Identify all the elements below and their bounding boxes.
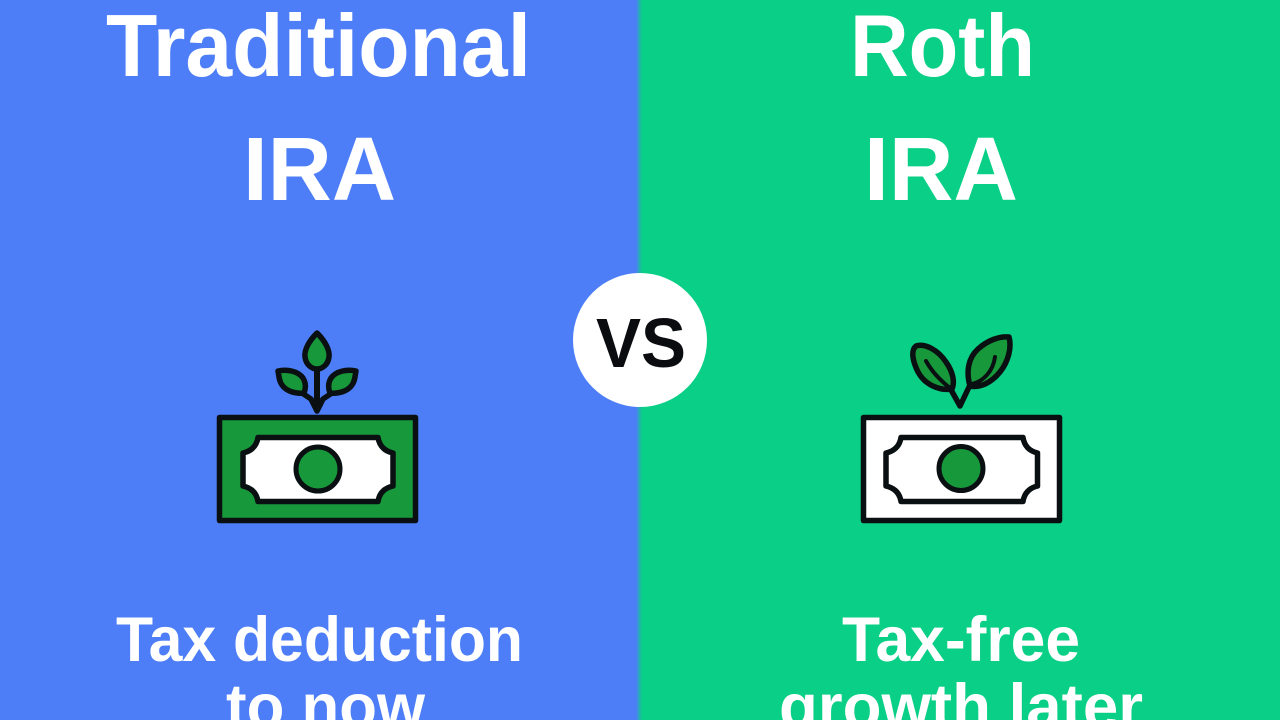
icon: banknote with sprout, white — [864, 337, 1060, 520]
heading: Traditional IRA — [106, 0, 531, 220]
heading: Traditional IRA: IRA — [243, 120, 396, 220]
heading: Roth IRA: IRA — [864, 120, 1018, 220]
panel: traditional IRA — [0, 0, 640, 720]
icon: two leaves — [913, 337, 1010, 406]
icon: green banknote — [220, 418, 416, 520]
icon: banknote with sprout, green — [220, 333, 416, 520]
VS badge — [573, 273, 707, 407]
heading: Roth IRA — [850, 0, 1035, 220]
text: tax deduction to now — [116, 605, 523, 720]
icon: sprout — [278, 333, 356, 411]
VS badge: VS — [596, 304, 686, 382]
text: tax-free growth later: Tax-free — [842, 605, 1080, 675]
text: tax-free growth later — [779, 605, 1143, 720]
icon: white banknote — [864, 418, 1060, 520]
text: tax deduction to now: Tax deduction — [116, 605, 523, 675]
panel: Roth IRA — [640, 0, 1280, 720]
